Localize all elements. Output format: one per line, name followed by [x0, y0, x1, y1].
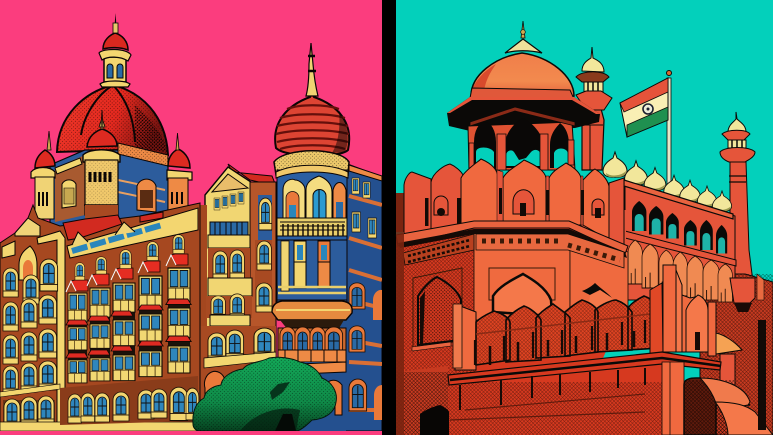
panel: bottom pink strip: [0, 431, 382, 435]
icon: small canopy: [716, 333, 742, 385]
icon: back minaret: [576, 47, 612, 170]
icon: right minaret: [720, 112, 755, 282]
icon: chhatri dome: [447, 21, 600, 131]
icon: ramp archway: [684, 378, 773, 435]
icon: front tower with small dome: [83, 110, 120, 222]
icon: Indian flag: [620, 70, 672, 200]
panel: main bastion wall: [396, 221, 628, 435]
icon: large arched recess: [412, 268, 462, 351]
divider: black vertical bar: [382, 0, 396, 435]
panel: central block behind the domes: [50, 143, 168, 230]
panel: teal background: [396, 0, 773, 435]
panel: fort parapet merlons: [396, 159, 626, 252]
panel: ground floor arcade: [60, 376, 199, 425]
icon: green tree: [193, 357, 336, 431]
panel: front parapet: [453, 296, 660, 370]
panel: corner pillar: [650, 265, 716, 356]
icon: left tower dome: [31, 131, 55, 219]
panel: main brick facade: [0, 203, 200, 431]
panel: chhatri arched pavilion: [468, 107, 575, 170]
icon: central arch: [489, 268, 612, 316]
panel: pink background: [0, 0, 382, 435]
panel: wall edge shadow: [396, 232, 766, 435]
panel: tower base arcade: [278, 327, 346, 365]
panel: far right wall: [700, 274, 773, 435]
panel: lower right brick wall: [276, 362, 346, 431]
panel: Red Fort illustration: [396, 21, 773, 435]
panel: dome tower body: [272, 151, 352, 330]
panel: left wing arched windows: [0, 259, 200, 431]
icon: right tower dome: [167, 133, 192, 210]
icon: main red dome with cupola: [57, 13, 168, 155]
panel: decorative frieze band: [403, 234, 624, 268]
panel: right wing wall: [300, 163, 382, 431]
panel: Taj Mahal Palace hotel illustration: [0, 13, 382, 431]
panel: gabled central wing: [199, 164, 276, 431]
panel: gallery with arches and domes: [603, 152, 755, 312]
icon: large ribbed dome: [275, 43, 349, 156]
panel: red-capped bay windows: [66, 235, 191, 383]
panel: lower red wall: [396, 352, 721, 435]
